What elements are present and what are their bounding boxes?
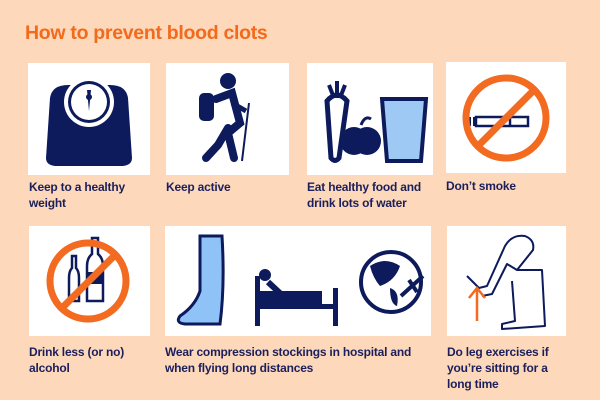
panel: alcohol bbox=[29, 226, 150, 336]
title: How to prevent blood clots bbox=[25, 22, 267, 44]
panel: healthy weight bbox=[28, 63, 150, 175]
icon: globe with plane bbox=[361, 252, 423, 312]
icon: stocking leg bbox=[178, 236, 223, 324]
icon: hospital bed bbox=[255, 269, 338, 326]
icon: scale bbox=[46, 77, 132, 166]
caption: healthy weight: Keep to a healthy weight bbox=[29, 180, 125, 210]
arrow: up bbox=[469, 288, 485, 321]
icon: no smoking bbox=[466, 78, 546, 158]
caption: don't smoke: Don’t smoke bbox=[446, 179, 516, 193]
caption: alcohol: Drink less (or no) alcohol bbox=[29, 345, 124, 375]
panel: keep active bbox=[166, 63, 289, 175]
caption: keep active: Keep active bbox=[166, 180, 231, 194]
panel: don't smoke bbox=[446, 62, 566, 173]
panel: leg exercises bbox=[447, 226, 566, 336]
caption: leg exercises: Do leg exercises if you’re sitting for a long time bbox=[447, 345, 549, 391]
panel: stockings bbox=[165, 226, 431, 336]
caption: food and water: Eat healthy food and drink lots of water bbox=[307, 180, 421, 210]
icon: no alcohol bbox=[50, 238, 126, 319]
caption: stockings: Wear compression stockings in hospital and when flying long distances bbox=[165, 345, 411, 375]
icon: legs bbox=[467, 236, 545, 329]
icon: hiker bbox=[199, 73, 249, 161]
panel: food and water bbox=[307, 63, 433, 175]
icon: carrot apple glass bbox=[327, 81, 426, 161]
